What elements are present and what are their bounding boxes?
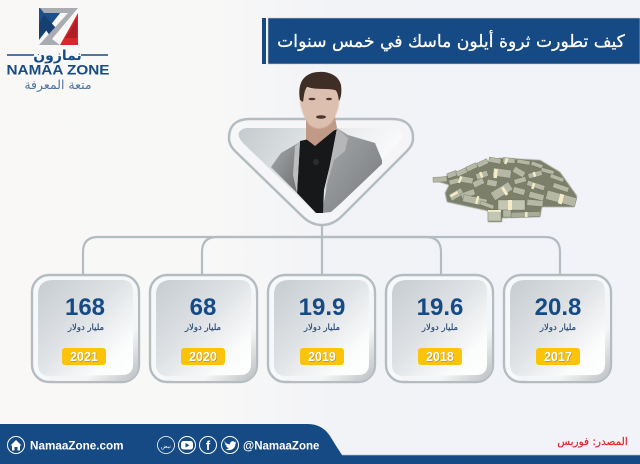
card shadow: [396, 285, 492, 381]
eyes and mouth: [308, 98, 332, 119]
value: 68: [190, 294, 216, 321]
card inner: [156, 280, 251, 376]
connector tree: [83, 224, 560, 274]
year badge: [62, 348, 106, 365]
card: 2021: [32, 275, 139, 382]
year badge: [181, 348, 225, 365]
icon: podcast: [158, 436, 174, 454]
title banner: [262, 18, 640, 64]
footer bar: [0, 424, 640, 464]
unit: مليار دولار: [539, 323, 576, 333]
triangle inner fill: [239, 128, 402, 211]
year badge: 2017: [545, 350, 572, 364]
hair: [299, 72, 341, 102]
icon: facebook: [200, 436, 216, 454]
unit: مليار دولار: [421, 323, 458, 333]
shirt: [297, 129, 337, 213]
year badge: [300, 348, 344, 365]
unit: مليار دولار: [303, 323, 340, 333]
card: 2018: [386, 275, 493, 382]
source note: المصدر: فوربس: [557, 436, 628, 448]
card shadow: [514, 285, 610, 381]
card inner: [38, 280, 133, 376]
social handle: @NamaaZone: [243, 440, 319, 452]
icon: facebook: f: [206, 438, 211, 453]
card shadow: [278, 285, 374, 381]
year badge: [418, 348, 462, 365]
face: [300, 88, 339, 128]
logo latin name: NAMAA ZONE: [6, 62, 110, 78]
portrait: Elon Musk: [271, 72, 382, 213]
logo arabic name: نمازون: [33, 48, 82, 64]
value: 168: [65, 294, 105, 321]
unit: مليار دولار: [67, 323, 104, 333]
year badge: 2021: [71, 350, 98, 364]
jacket right: [322, 128, 382, 213]
card shadow: [160, 285, 256, 381]
icon: twitter: [222, 436, 238, 454]
portrait triangle frame: [229, 119, 413, 225]
year badge: [536, 348, 580, 365]
logo: Namaa Zone: [6, 8, 110, 93]
year badge: 2017: [544, 350, 572, 364]
left lapel: [293, 142, 300, 193]
value: 19.9: [299, 294, 345, 321]
value: 19.6: [417, 294, 463, 321]
value: 20.8: [535, 294, 581, 321]
year badge: 2019: [309, 350, 336, 364]
card: 2019: [268, 275, 375, 382]
icon: youtube: [178, 436, 196, 454]
year badge: 2019: [308, 350, 336, 364]
title text: كيف تطورت ثروة أيلون ماسك في خمس سنوات: [277, 30, 626, 52]
year badge: 2018: [426, 350, 454, 364]
year badge: 2021: [70, 350, 98, 364]
neck: [306, 112, 337, 146]
card shadow: [42, 285, 138, 381]
card inner: [392, 280, 487, 376]
card: 2017: [504, 275, 611, 382]
jacket left: [271, 142, 300, 193]
year badge: 2020: [189, 350, 217, 364]
logo mark: [39, 8, 78, 45]
card inner: [274, 280, 369, 376]
card: 2020: [150, 275, 257, 382]
right lapel: [322, 128, 348, 205]
money pile: [433, 157, 577, 222]
website address: NamaaZone.com: [30, 440, 124, 452]
year badge: 2018: [427, 350, 454, 364]
year badge: 2020: [190, 350, 217, 364]
icon: website home: [8, 436, 24, 454]
card inner: [510, 280, 605, 376]
logo tagline: متعة المعرفة: [24, 77, 92, 93]
microphone: [313, 159, 319, 165]
icon: podcast: نبض: [161, 444, 171, 450]
unit: مليار دولار: [184, 323, 221, 333]
